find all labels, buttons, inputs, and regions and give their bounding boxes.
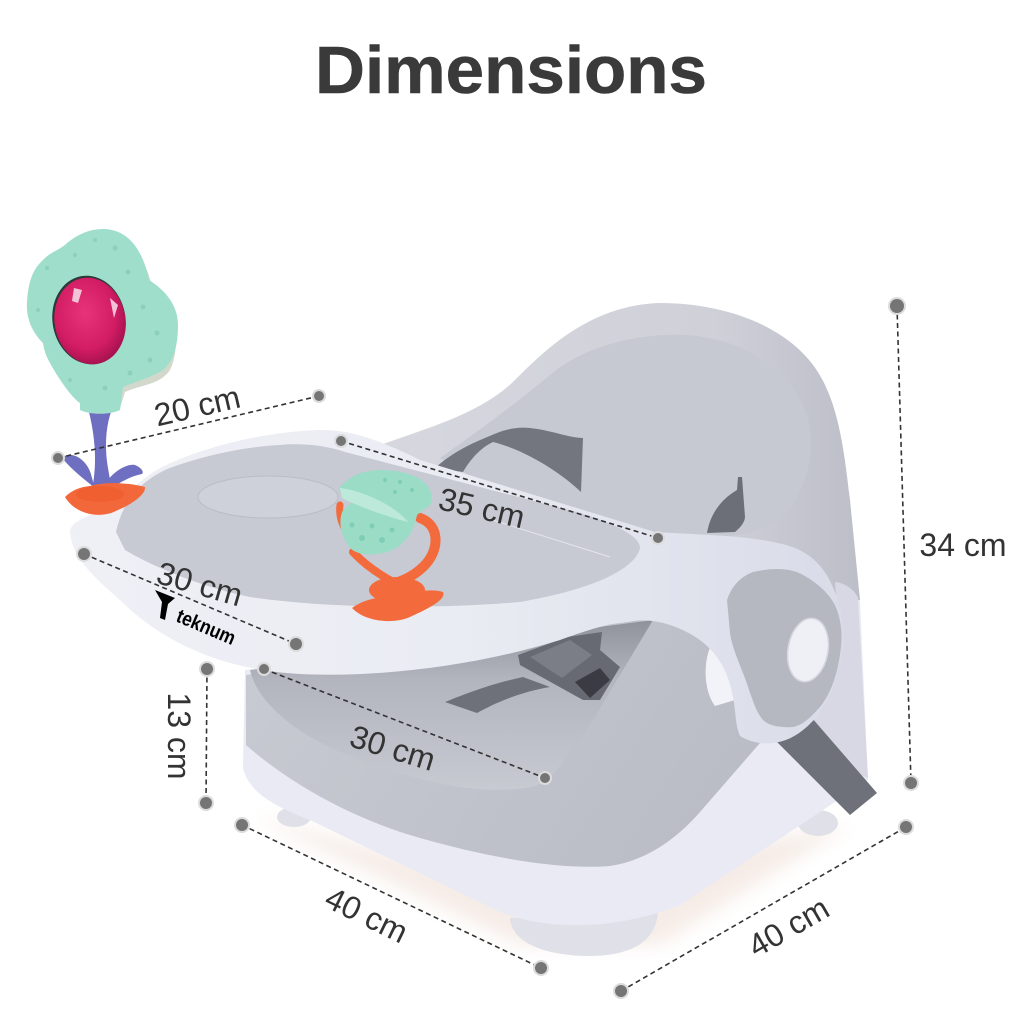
tray highlight line [483, 517, 610, 557]
dimension: 30 cm tray: 30 cm [153, 555, 247, 613]
teether orange stand [340, 505, 436, 583]
dimension: 35 cm [334, 434, 665, 545]
dimension: 40 cm right [613, 819, 914, 999]
flower dots [36, 238, 160, 390]
booster seat product illustration [27, 229, 877, 956]
logo [155, 590, 239, 650]
title: Dimensions [315, 33, 707, 108]
tray cup holder [198, 476, 338, 518]
base grey shell [246, 610, 790, 867]
dimension: 34 cm: 34 cm [919, 527, 1007, 563]
crotch strap [445, 677, 550, 713]
pivot hinge [706, 643, 735, 706]
shoulder strap right [707, 477, 745, 533]
seat recess [250, 620, 653, 790]
toy: flower rattle [27, 229, 178, 515]
tray white frame [70, 430, 843, 743]
dimension: 40 cm right: 40 cm [742, 889, 835, 964]
flower stem and leaves [62, 412, 143, 490]
hip strap [777, 718, 877, 815]
back feet [277, 807, 838, 836]
dimension: 34 cm [888, 297, 1007, 791]
toy: teether [340, 470, 443, 621]
tray side panel [727, 569, 842, 727]
tray [70, 430, 843, 743]
backrest [375, 303, 860, 640]
side panel right [782, 582, 868, 778]
dimension: 20 cm: 20 cm [151, 379, 244, 433]
buckle [518, 632, 620, 700]
dimension: 35 cm: 35 cm [435, 481, 528, 535]
shoulder strap left [435, 428, 583, 492]
dimension: 20 cm [51, 379, 326, 465]
logo: teknum [173, 605, 239, 650]
dimension: 30 cm tray [76, 546, 304, 652]
front foot [510, 912, 658, 956]
dimension: 13 cm: 13 cm [161, 692, 197, 780]
dimension: 30 cm seat [257, 662, 552, 785]
release button [783, 615, 833, 685]
teether dots [350, 478, 414, 543]
base body [243, 600, 868, 925]
floor shadow [250, 815, 850, 945]
dimension: 13 cm [161, 661, 215, 811]
dimension: 40 cm left [234, 817, 549, 976]
dimension: 40 cm left: 40 cm [320, 880, 414, 950]
teether head [340, 495, 420, 554]
flower base [65, 483, 145, 515]
dimension: 30 cm seat: 30 cm [346, 718, 440, 778]
flower side [100, 240, 176, 408]
flower body [27, 229, 178, 414]
flower ball [45, 270, 133, 370]
tray recess [116, 444, 640, 607]
